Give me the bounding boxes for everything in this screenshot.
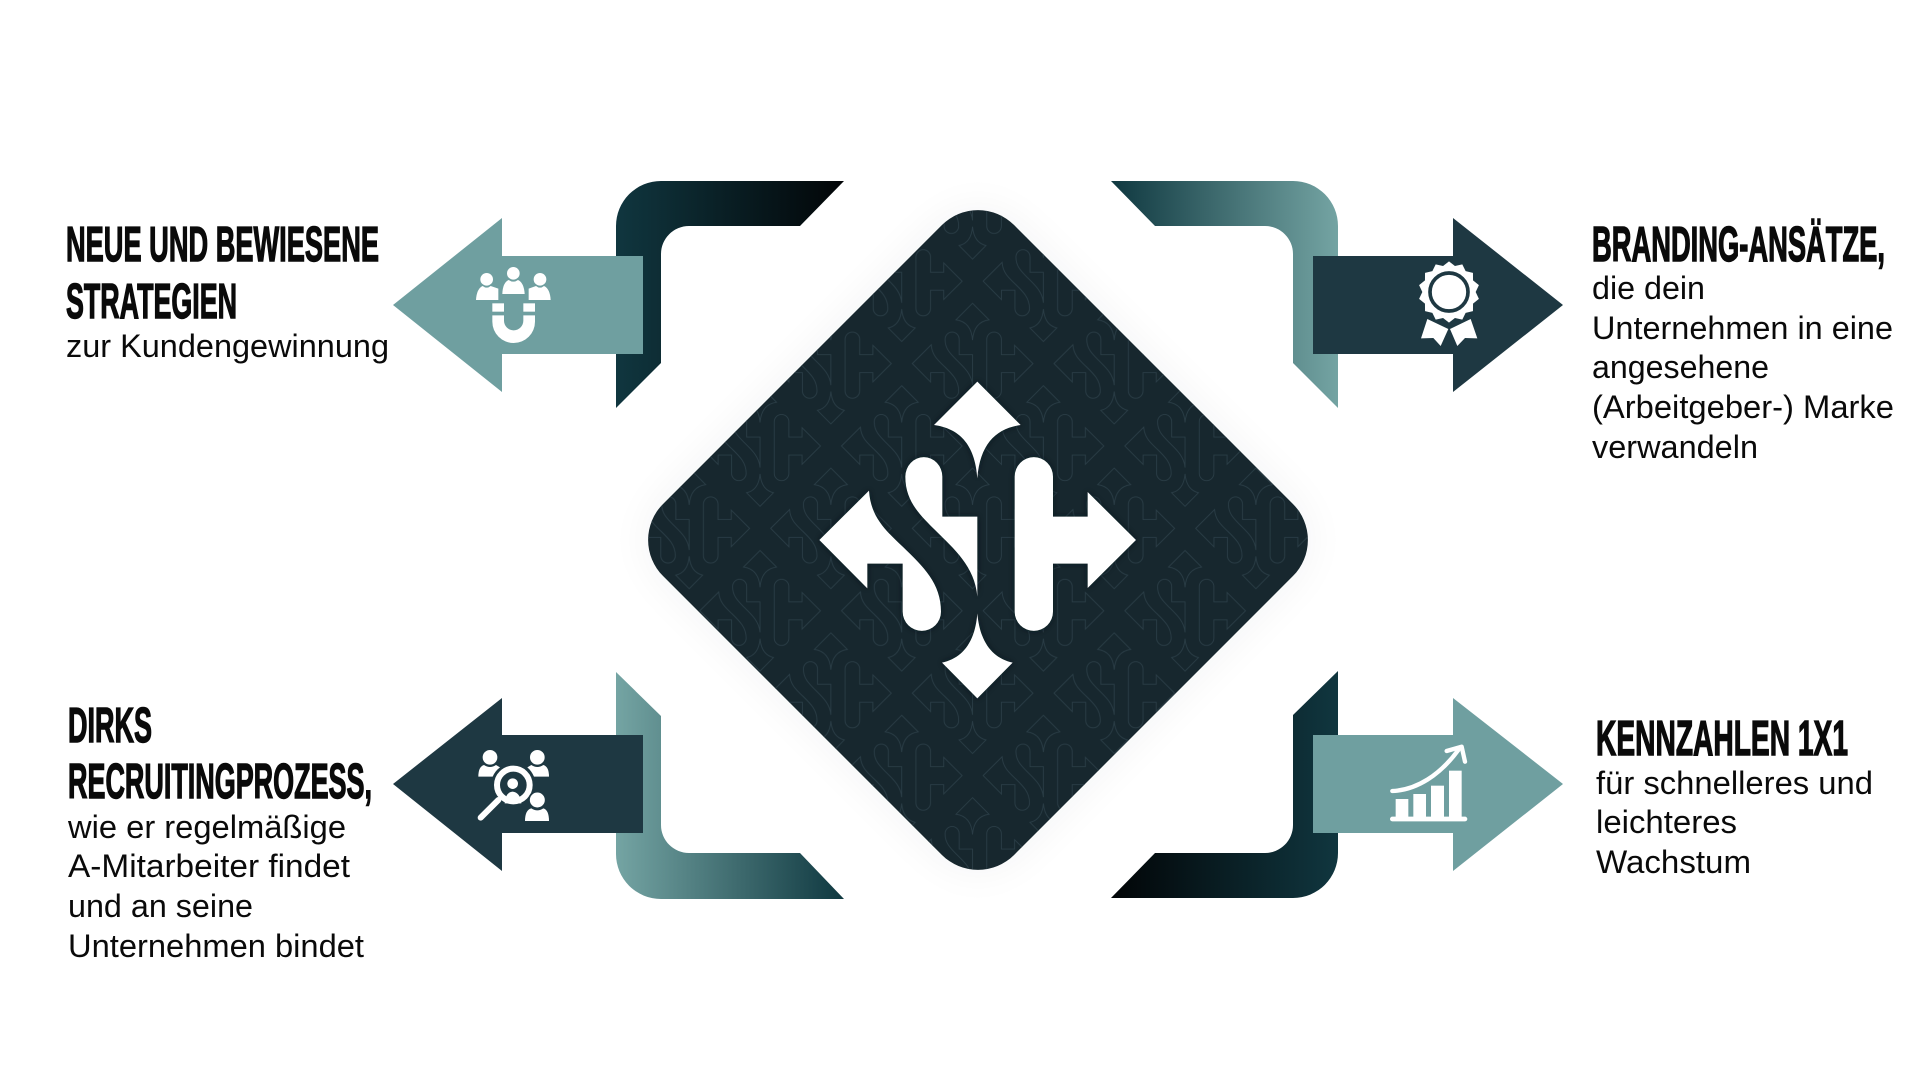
text block: Dirks Recruitingprozess: DIRKS	[68, 699, 152, 753]
text block: Dirks Recruitingprozess: RECRUITINGPROZESS,	[68, 755, 372, 809]
text block: Branding-Ansätze: die dein	[1592, 270, 1705, 306]
icon: growth chart	[1392, 747, 1465, 819]
arrow: bottom right	[1313, 698, 1563, 871]
text block: Branding-Ansätze: verwandeln	[1592, 429, 1758, 465]
text block: Branding-Ansätze: Unternehmen in eine	[1592, 310, 1893, 346]
bracket: top right	[1111, 181, 1338, 408]
text block: Kennzahlen 1x1: leichteres	[1596, 804, 1737, 840]
text block: Neue und bewiesene Strategien: zur Kundengewinnung	[66, 328, 389, 364]
text block: Dirks Recruitingprozess: wie er regelmäßige	[67, 809, 346, 845]
text block: Dirks Recruitingprozess	[67, 699, 372, 964]
text block: Branding-Ansätze: angesehene	[1592, 349, 1769, 385]
icon: candidate search	[478, 750, 549, 821]
icon: award badge	[1419, 261, 1479, 346]
icon: central SC logo with four arrows	[819, 382, 1136, 698]
bracket: bottom right	[1111, 671, 1338, 898]
arrow: bottom left	[393, 698, 643, 871]
text block: Dirks Recruitingprozess: A-Mitarbeiter findet	[68, 848, 350, 884]
text block: Kennzahlen 1x1: Wachstum	[1596, 844, 1751, 880]
text block: Branding-Ansätze	[1592, 218, 1894, 465]
text block: Kennzahlen 1x1	[1596, 712, 1873, 880]
icon: people and magnet	[476, 267, 551, 343]
text block: Neue und bewiesene Strategien: STRATEGIEN	[66, 275, 237, 329]
text block: Neue und bewiesene Strategien: NEUE UND BEWIESENE	[66, 218, 379, 272]
text block: Dirks Recruitingprozess: und an seine	[68, 888, 253, 924]
text block: Branding-Ansätze: (Arbeitgeber-) Marke	[1592, 389, 1894, 425]
arrow: top right	[1313, 218, 1563, 392]
bracket: bottom left	[616, 672, 844, 899]
text block: Kennzahlen 1x1: für schnelleres und	[1596, 765, 1873, 801]
arrow: top left	[393, 218, 643, 392]
panel: central diamond	[648, 210, 1308, 870]
bracket: top left	[616, 181, 844, 408]
text block: Neue und bewiesene Strategien	[66, 218, 389, 364]
text block: Dirks Recruitingprozess: Unternehmen bindet	[68, 928, 364, 964]
